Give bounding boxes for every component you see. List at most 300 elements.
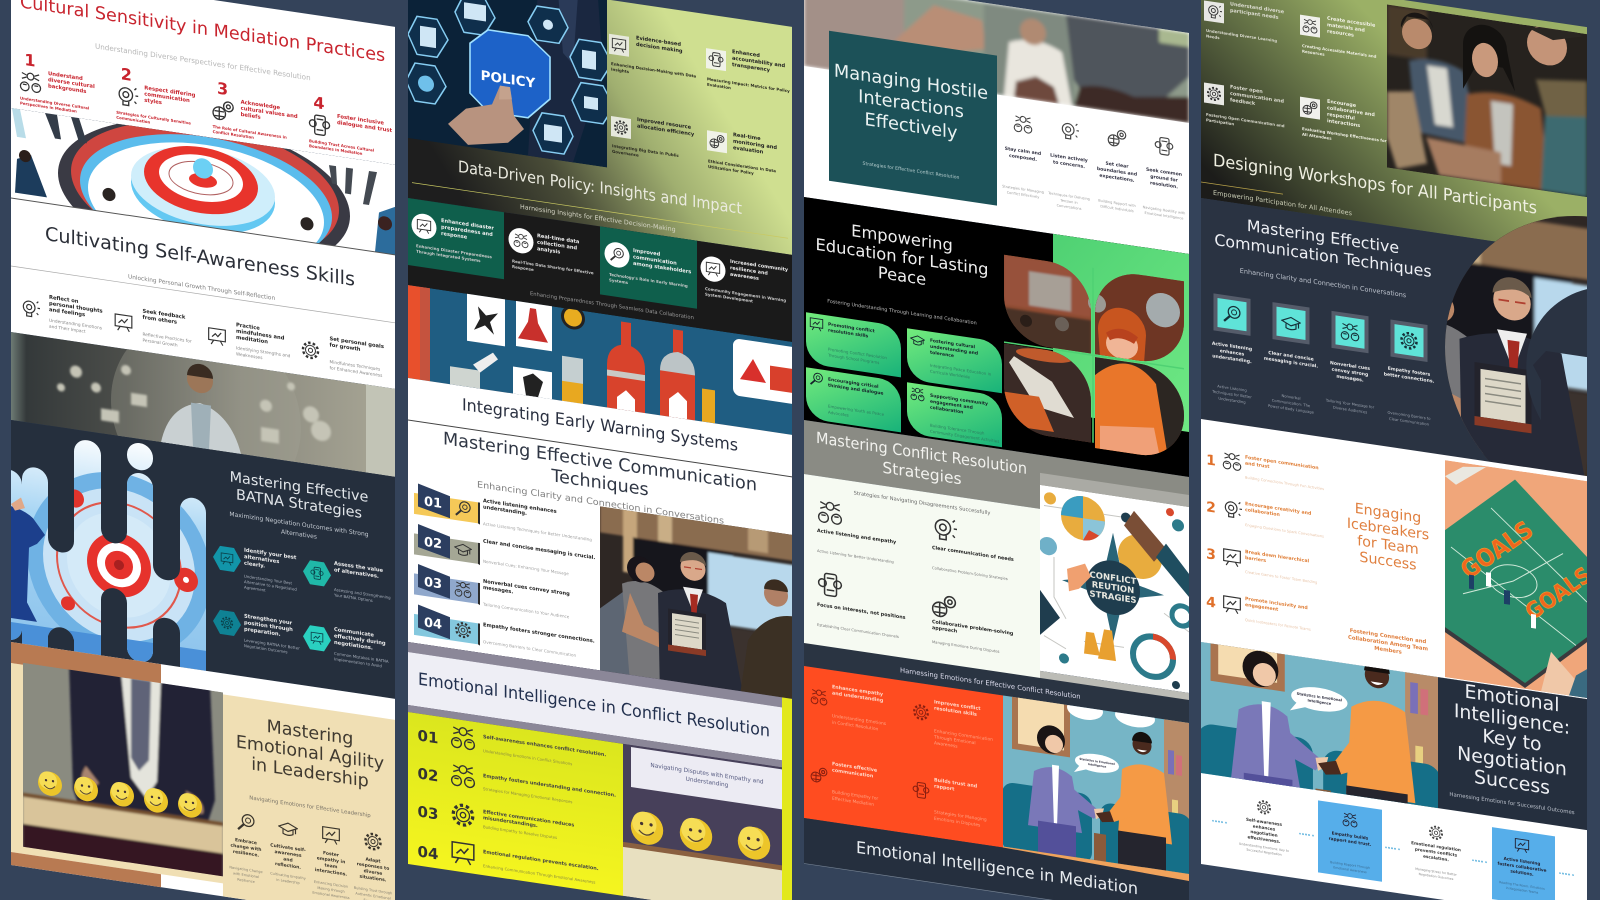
item 1	[213, 546, 296, 592]
item 3	[1097, 127, 1137, 214]
title: Education for Lasting	[816, 235, 988, 279]
title: Designing Workshops for All Participants	[1213, 151, 1537, 219]
dotted connectors	[1212, 820, 1574, 876]
item 2: Strategies for Culturally Sensitive	[116, 110, 191, 126]
item 3: among stakeholders	[633, 261, 691, 275]
image: goals game board	[1445, 460, 1597, 700]
item 2: Create accessible	[1327, 16, 1375, 29]
item 1: Reflect on	[49, 295, 79, 305]
subtitle: Fostering Connection and	[1350, 628, 1426, 645]
item 2: Conversations	[1057, 203, 1082, 211]
item 4: collaborative and	[1327, 105, 1375, 118]
item 4	[1498, 836, 1547, 896]
image: workshop participants	[1387, 0, 1587, 197]
item 01: 01	[424, 494, 442, 512]
item 1: and Their Impact	[49, 324, 86, 335]
item 3: empathy in	[317, 855, 345, 865]
title: Icebreakers	[1347, 516, 1429, 544]
item 2: Resources	[1302, 48, 1325, 57]
item 3: Tailoring Your Message for	[1326, 399, 1374, 410]
title panel: Success	[1474, 766, 1550, 799]
item 04: Enhancing Communication Through Emotional Awareness	[483, 863, 595, 885]
subtitle box: Navigating Disputes with Empathy and	[650, 763, 764, 786]
item 2: Awareness	[934, 740, 958, 750]
title: BATNA Strategies	[236, 487, 362, 522]
item 01: Active listening enhances	[483, 498, 557, 515]
item 1: Enhances empathy	[832, 685, 883, 698]
footer subtitle: Enhancing Preparedness Through Seamless Data Collaboration	[530, 291, 694, 321]
item 4: approach	[932, 625, 958, 635]
item 02: 02	[424, 535, 442, 553]
item 04: Overcoming Barriers to Clear Communication	[483, 639, 576, 658]
item 2: collaboration	[1245, 507, 1280, 518]
card 2: tolerance	[930, 350, 954, 359]
item 3: Making through	[317, 886, 345, 894]
item 3: Managing Stress for Better	[1415, 867, 1457, 877]
image: tense discussion	[804, 0, 1189, 123]
item 4	[932, 594, 1014, 656]
image: policy hologram: POLICY	[481, 68, 535, 92]
item 4	[1300, 95, 1387, 149]
item 3: Emotional Awareness	[312, 891, 350, 900]
item 04: 04	[418, 842, 438, 863]
item 03	[418, 799, 574, 844]
item 3	[312, 825, 350, 900]
item 1	[1239, 798, 1289, 858]
item 1: change with	[231, 843, 261, 853]
item 1	[20, 54, 94, 113]
item 1: and understanding	[832, 690, 884, 704]
item 3: Improved	[633, 248, 660, 258]
yellow panel	[408, 712, 623, 896]
image: goals game board: GOALS	[1456, 516, 1539, 585]
item 1	[1206, 449, 1324, 491]
subtitle: Fostering Understanding Through Learning and Collaboration	[827, 298, 977, 327]
item 2: materials and	[1327, 22, 1365, 34]
title: Cultivating Self-Awareness Skills	[45, 222, 355, 291]
slide: Mastering Effective Communication Techniques (dark)	[1201, 150, 1600, 590]
item 03: Nonverbal cues convey strong	[483, 579, 570, 597]
slide: Engaging Icebreakers for Team Success	[1201, 419, 1597, 701]
subtitle: Strategies for Navigating Disagreements Successfully	[854, 490, 990, 517]
card 3: thinking and dialogue	[828, 383, 883, 397]
item 4: resolution.	[1150, 180, 1178, 190]
item 1: Active Listening for Better Understanding	[817, 549, 894, 564]
title panel: Harnessing Emotions for Successful Outcomes	[1449, 792, 1575, 816]
item 2: Listen actively	[1050, 153, 1088, 164]
item 3	[817, 572, 906, 640]
item 2: Cultivating Empathy	[270, 871, 306, 881]
item 2	[1329, 811, 1372, 875]
item 3: Negotiation Outcomes	[244, 643, 288, 654]
item 2	[508, 226, 594, 281]
item 1: Agreement	[244, 585, 266, 593]
item 3	[208, 322, 290, 360]
item 3	[212, 82, 298, 139]
item 2	[114, 308, 192, 347]
item 4: Encourage	[1327, 99, 1356, 109]
item 1	[817, 501, 897, 565]
item 1: and trust	[1245, 461, 1270, 470]
item 04: Empathy fosters stronger connections.	[483, 622, 595, 645]
item 3: Conflict Resolution	[213, 129, 254, 140]
item 2: accountability and	[732, 55, 785, 69]
item 1: participant needs	[1230, 8, 1279, 21]
item 3	[811, 758, 878, 808]
item 1: Techniques for Better	[1211, 390, 1252, 400]
item 4: for Enhanced Awareness	[330, 365, 383, 379]
item 4: Communicate	[334, 627, 374, 639]
item 2: styles	[144, 98, 162, 106]
item 2: 2	[121, 64, 132, 85]
subtitle: Harnessing Insights for Effective Decision-Making	[520, 204, 676, 234]
item 1	[412, 212, 494, 265]
item 2: communication	[144, 91, 190, 104]
item 4: Increased community	[730, 260, 788, 273]
item 2: Assessing and Strengthening	[334, 587, 391, 600]
image: conflict resolution compass: STRAGIES	[1089, 589, 1137, 606]
item 3: Break down hierarchical	[1245, 550, 1309, 564]
item 2	[706, 48, 790, 94]
item 03: messages.	[483, 585, 513, 595]
item 02: Clear and concise messaging is crucial.	[483, 539, 595, 561]
item 3: Practice	[236, 322, 260, 332]
item 4: in Negotiation Teams	[1506, 886, 1539, 895]
item 3: beliefs	[241, 112, 261, 121]
item 4	[1206, 590, 1311, 632]
slide: Mastering Effective BATNA Strategies	[11, 420, 395, 699]
slide: Seamless data collaboration	[408, 198, 792, 343]
item 3: Identifying Strengths and	[236, 346, 290, 359]
item 03: 03	[418, 802, 438, 823]
item 4: Emotional Intelligence	[1145, 211, 1183, 221]
item 1	[609, 34, 696, 78]
subtitle: Enhancing Clarity and Connection in Conversations	[477, 480, 724, 527]
subtitle: Enhancing Clarity and Connection in Conversations	[1240, 267, 1407, 299]
item 2: to concerns.	[1053, 159, 1085, 170]
item 1	[229, 812, 263, 885]
item 4: Community Engagement in Warning	[705, 286, 786, 303]
item 1	[1211, 293, 1252, 406]
item 1: Successful Negotiation	[1246, 848, 1282, 857]
item 2: Techniques for Defusing	[1048, 191, 1090, 201]
card 4: collaboration	[930, 405, 963, 416]
item 4: System Development	[705, 291, 753, 304]
item 3: communication	[633, 254, 677, 267]
item 4	[1384, 319, 1435, 428]
item 4: dialogue and trust	[337, 120, 393, 134]
item 4	[354, 831, 392, 900]
item 1: Understanding	[1218, 397, 1246, 405]
item 2: Your BATNA Options	[334, 592, 373, 603]
band subtitle: Harnessing Emotions for Effective Conflict Resolution	[900, 666, 1081, 701]
item 3: expectations.	[1099, 173, 1135, 184]
item 1: with Emotional	[233, 871, 259, 879]
item 2: in Leadership	[276, 878, 300, 885]
title: Peace	[878, 263, 926, 289]
item 3: Nonverbal cues	[1330, 361, 1370, 372]
slide: Cultural Sensitivity in Mediation Practices	[11, 0, 395, 254]
slide: Emotional Intelligence: Key to Negotiation Success	[1188, 578, 1587, 900]
item 2: transparency	[732, 62, 771, 74]
item 2: awareness	[274, 849, 302, 859]
item 4: Utilization for Policy	[708, 164, 754, 176]
item 1: effectiveness.	[1247, 834, 1281, 844]
image: smiley balls	[623, 744, 782, 900]
item 02: Nonverbal Cues: Enhancing Your Message	[483, 559, 569, 576]
image: conflict resolution compass: REUTION	[1092, 580, 1134, 596]
card 3: Empowering Youth as Peace	[828, 404, 884, 417]
item 4: Ethical Considerations in Data	[708, 158, 776, 173]
item 2	[914, 696, 993, 755]
item 3: Systems	[609, 277, 629, 285]
item 2: Cultivate self-	[270, 843, 306, 854]
item 2	[1264, 301, 1318, 415]
image: goals game board: GOALS	[1520, 561, 1597, 625]
subtitle: Maximizing Negotiation Outcomes with Strong	[229, 511, 369, 538]
item 4: Emotions in Disputes	[934, 816, 981, 829]
item 1: Needs	[1206, 33, 1220, 40]
item 04	[418, 837, 599, 887]
item 04	[414, 604, 595, 663]
item 4: responses to	[357, 861, 389, 872]
title card: Interactions	[858, 86, 964, 123]
item 02	[414, 523, 595, 582]
item 4: better connections.	[1384, 371, 1435, 385]
image: conflict resolution compass: CONFLICT	[1090, 570, 1137, 587]
item 2	[303, 560, 390, 602]
subtitle box: Understanding	[686, 777, 729, 789]
item 02	[418, 759, 616, 812]
item 4: Managing Emotions During Disputes	[932, 640, 1000, 654]
item 02: Strategies for Managing Emotional Responses	[483, 786, 572, 804]
image: negotiation conversation	[1188, 578, 1456, 860]
slide: Managing Hostile Interactions Effectively	[804, 0, 1189, 254]
item 03: Effective communication reduces	[483, 809, 574, 829]
item 1: Strategies for Managing	[1002, 184, 1044, 195]
item 1: clearly.	[244, 561, 265, 570]
item 4: awareness	[730, 272, 759, 282]
item 4: Collaborative problem-solving	[932, 620, 1013, 637]
item 1	[811, 681, 887, 734]
column 1 of slides	[0, 0, 395, 900]
title panel: Key to	[1482, 725, 1542, 756]
item 4	[302, 336, 384, 377]
item 1: backgrounds	[48, 83, 86, 95]
item 2	[1206, 495, 1324, 539]
item 4	[707, 128, 777, 179]
item 2: Personal Growth	[143, 337, 178, 349]
card 3: Encouraging critical	[828, 378, 879, 390]
item 3: Emotional regulation	[1411, 840, 1461, 852]
card 1: Promoting conflict	[828, 323, 875, 334]
slide: Mastering Conflict Resolution Strategies	[804, 420, 1196, 704]
item 1: in Conflict Resolution	[832, 720, 879, 733]
card 3	[806, 367, 901, 432]
item 4: effectively during	[334, 633, 386, 647]
item 03: 03	[424, 575, 442, 593]
slide: Mastering Effective Communication Techniques: Techniques	[550, 466, 649, 501]
item 3: Diverse Audiences	[1333, 406, 1367, 415]
item 1: Stay calm and	[1005, 147, 1041, 157]
item 1: understanding.	[1212, 353, 1252, 365]
item 4: diverse	[364, 868, 382, 877]
item 1: response	[441, 231, 468, 241]
item 01: Understanding Emotions in Conflict Situations	[483, 748, 572, 766]
item 1: Navigating Change	[229, 865, 263, 874]
item 2: Reflective Practices for	[142, 332, 192, 345]
image: conflict resolution compass	[1039, 485, 1196, 704]
item 2: resolution skills	[934, 706, 977, 718]
item 1	[1002, 113, 1044, 200]
item 2: Respect differing	[144, 85, 195, 99]
item 2: Building Rapport Through	[1330, 860, 1370, 870]
item 4: situations.	[360, 874, 387, 884]
item 1: Understand	[48, 71, 83, 82]
item 4: for growth	[330, 342, 361, 353]
item 3: boundaries and	[1097, 166, 1137, 178]
item 4: Real-time	[733, 132, 761, 142]
column 2 of slides	[406, 0, 818, 900]
item 01	[418, 721, 606, 772]
item 2: Improves conflict	[934, 700, 981, 712]
title: Success	[1359, 550, 1417, 574]
item 1: Perspectives in Mediation	[20, 100, 77, 114]
item 3: Creative Games to Foster Team Bonding	[1245, 570, 1317, 585]
title: Data-Driven Policy: Insights and Impact	[458, 157, 742, 218]
item 4	[1143, 135, 1185, 221]
image: policy hologram	[406, 0, 614, 168]
item 3: mindfulness and	[236, 329, 285, 342]
item 01: understanding.	[483, 504, 527, 517]
item 3	[611, 113, 695, 166]
title card	[829, 31, 997, 206]
item 4	[700, 254, 789, 309]
title: Mastering Effective Communication	[443, 429, 757, 496]
item 2: collection and	[537, 240, 578, 252]
title: for Team	[1357, 533, 1419, 558]
item 1: Resilience	[237, 877, 255, 884]
item 3: Participation	[1206, 117, 1234, 126]
item 3: Focus on interests, not positions	[817, 602, 906, 621]
item 2: analysis	[537, 246, 560, 256]
item 2: Encourage creativity and	[1245, 502, 1311, 517]
column 4 of slides	[1188, 0, 1600, 900]
card 3: Advocates	[828, 410, 849, 418]
subtitle: Navigating Emotions for Effective Leadership	[249, 795, 371, 819]
item 3: Effective Mediation	[832, 796, 874, 808]
item 4: interactions	[1327, 118, 1360, 129]
subtitle: Collaboration Among Team	[1348, 635, 1428, 653]
item 4: Building Trust Across Cultural	[309, 138, 374, 153]
card 2: Curricula Worldwide	[930, 369, 971, 380]
item 2: Clear communication of needs	[932, 545, 1014, 563]
item 02: Empathy fosters understanding and connection.	[483, 773, 616, 799]
title: Engaging	[1355, 501, 1421, 527]
item 3: communication and	[1230, 91, 1284, 105]
item 4: Set personal goals	[330, 336, 384, 350]
item 1: Building Connections Through Fun Activities	[1245, 476, 1324, 491]
item 03: Tailoring Communication to Your Audience	[482, 601, 570, 619]
subtitle: Members	[1374, 646, 1402, 656]
item 03: Building Empathy to Resolve Disputes	[483, 824, 557, 840]
item 2: Seek feedback	[142, 308, 185, 321]
item 2: Assess the value	[334, 561, 383, 574]
card 4: engagement and	[930, 399, 973, 411]
image: award presenter in circle	[1372, 175, 1600, 590]
item 3: Negotiation Outcomes	[1419, 872, 1454, 881]
slide: Cultivating Self-Awareness Skills	[11, 198, 395, 477]
item 4: Active listening	[1504, 856, 1540, 866]
item 3: Technology's Role in Early Warning	[609, 272, 688, 288]
item 3: Fostering Open Communication and	[1206, 112, 1285, 128]
item 01: 01	[418, 726, 438, 747]
card 1	[806, 312, 901, 377]
item 4: Boundaries in Mediation	[309, 143, 363, 156]
item 3: convey strong	[1332, 367, 1368, 378]
title card: Strategies for Effective Conflict Resolution	[863, 161, 960, 181]
slide: Data-Driven Policy	[406, 0, 792, 255]
item 3: communication	[832, 767, 874, 780]
item 2: Response	[512, 264, 534, 272]
slide: Emotional Intelligence in Conflict Resolution	[408, 642, 792, 900]
image: mediation target circle	[11, 108, 395, 254]
item 3: prevents conflicts	[1415, 846, 1458, 858]
card 4: Community Engagement Activities	[930, 429, 999, 444]
item 1: diverse cultural	[48, 77, 95, 90]
item 2: messaging is crucial.	[1264, 356, 1318, 370]
item 4: monitoring and	[733, 139, 777, 151]
item 1: Insights	[611, 67, 630, 74]
title: Emotional Intelligence in Mediation	[856, 838, 1138, 898]
title: Mastering Conflict Resolution	[816, 429, 1027, 478]
item 1: Understanding Emotions: Key to	[1239, 842, 1289, 853]
item 3: team	[325, 862, 338, 870]
image: award presentation	[600, 498, 818, 761]
title band	[408, 652, 782, 760]
item 2: Real-time data	[537, 233, 579, 245]
card 1: Promoting Conflict Resolution	[828, 347, 887, 360]
title: in Leadership	[251, 755, 369, 792]
item 1	[22, 294, 102, 333]
item 3: Building Rapport with	[1098, 199, 1136, 208]
item 3	[1204, 80, 1285, 134]
item 2: Collaborative Problem-Solving Strategies	[932, 566, 1008, 581]
item 04: Emotional regulation prevents escalation.	[483, 849, 599, 872]
item 3: Integrating Big Data in Public	[612, 143, 679, 158]
title: Mastering Effective	[1247, 216, 1399, 257]
card 2: Fostering cultural	[930, 339, 975, 350]
item 1: Self-awareness	[1246, 817, 1282, 827]
slide: Mastering Emotional Agility in Leadership	[11, 642, 395, 900]
item 2: Enhancing Communication	[934, 729, 993, 743]
item 4	[913, 774, 987, 830]
item 1: personal thoughts	[49, 301, 103, 315]
item 2: Clear and concise	[1268, 351, 1314, 363]
item 3: 3	[1206, 546, 1216, 564]
item 4	[308, 96, 392, 155]
title: Emotional Intelligence in Conflict Resolution	[418, 670, 770, 742]
item 01: Self-awareness enhances conflict resolution.	[483, 734, 606, 758]
item 4: engagement	[1245, 602, 1279, 613]
item 4: Quick Icebreakers for Remote Teams	[1245, 618, 1311, 632]
item 3: The Role of Cultural Awareness in	[213, 124, 287, 140]
item 4: Adapt	[365, 857, 381, 865]
image: suited figure with smiley balls	[23, 657, 223, 878]
blue highlight boxes	[1318, 800, 1382, 882]
item 1: Active listening	[1212, 342, 1252, 353]
item 4: fosters collaborative	[1498, 861, 1547, 873]
